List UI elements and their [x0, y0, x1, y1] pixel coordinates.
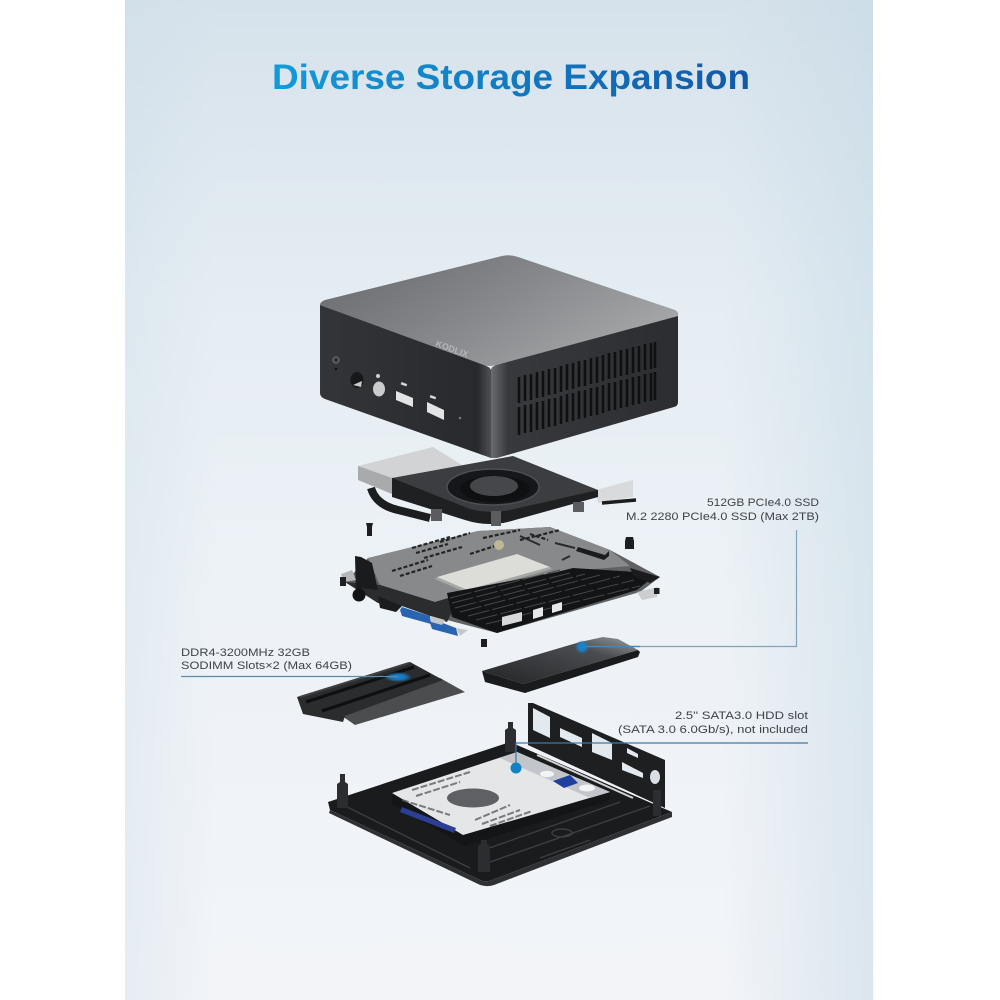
- HDD label: 2.5'' SATA3.0 HDD slot: [675, 710, 809, 722]
- mounting posts: [431, 502, 584, 526]
- drive caddy with HDD: [328, 703, 672, 886]
- cooling fan assembly: [358, 447, 636, 526]
- RAM label: DDR4-3200MHz 32GB: [181, 647, 310, 659]
- callout: SSD: M.2 2280 PCIe4.0 SSD (Max 2TB): [626, 511, 819, 523]
- motherboard: [340, 527, 660, 636]
- M.2 SSD on board: [437, 554, 550, 590]
- title: Diverse Storage Expansion: [272, 58, 750, 97]
- blue stripe: [400, 807, 456, 833]
- tray detail lines: [345, 802, 650, 868]
- board: [345, 527, 660, 633]
- right connectors: [637, 587, 658, 600]
- bracket cut-outs: [533, 708, 643, 778]
- HDD leader line: [516, 743, 808, 768]
- connectors on board: [576, 547, 609, 560]
- rear ports: [502, 612, 522, 626]
- side vent slots: [519, 342, 655, 435]
- fan body: [392, 478, 598, 524]
- drive side: [392, 792, 610, 846]
- callout: RAM: SODIMM Slots×2 (Max 64GB): [181, 660, 352, 672]
- rear bracket: [528, 703, 665, 808]
- callout: HDD: [510, 710, 809, 774]
- print lines: [402, 772, 532, 826]
- silver heat plates: [358, 447, 470, 493]
- USB connectors blue: [400, 607, 431, 624]
- HDD marker: [510, 762, 522, 774]
- HDD: [392, 752, 610, 846]
- WD logo: [553, 775, 578, 788]
- SSD label: 512GB PCIe4.0 SSD: [707, 497, 819, 509]
- SSD top: [482, 637, 638, 684]
- RAM contact board: [342, 678, 465, 725]
- standoff posts: [337, 722, 661, 872]
- base tray: [328, 742, 672, 881]
- SSD module: [482, 637, 640, 693]
- black heatsink fins: [447, 568, 647, 633]
- blue highlight: [384, 672, 412, 682]
- top lid: [320, 255, 678, 366]
- callout: SSD: [575, 497, 819, 654]
- platter hub: [447, 788, 499, 808]
- loose screws: [366, 523, 634, 647]
- SSD side: [482, 650, 640, 693]
- heat pipe and feet: [371, 488, 430, 518]
- callout: HDD: (SATA 3.0 6.0Gb/s), not included: [618, 724, 808, 736]
- drive label: [392, 752, 610, 835]
- RAM module: [297, 662, 465, 725]
- SSD leader line: [640, 530, 796, 646]
- RAM leader line: [181, 676, 398, 678]
- SSD marker: [575, 640, 589, 654]
- side panel with vents: [491, 316, 678, 458]
- background panel: [125, 0, 873, 1000]
- logo on lid: KODLIX: [434, 338, 470, 360]
- front ports: [333, 357, 461, 420]
- fan rotor: [447, 469, 539, 505]
- rail: [537, 755, 633, 798]
- front panel: [320, 305, 491, 458]
- left connectors and standoffs: [355, 556, 378, 596]
- mini PC enclosure: [320, 255, 678, 458]
- callout: RAM: [181, 647, 398, 676]
- chips: [392, 530, 560, 576]
- RAM heat spreader: [297, 662, 443, 722]
- dark lower-left board area: [345, 582, 468, 622]
